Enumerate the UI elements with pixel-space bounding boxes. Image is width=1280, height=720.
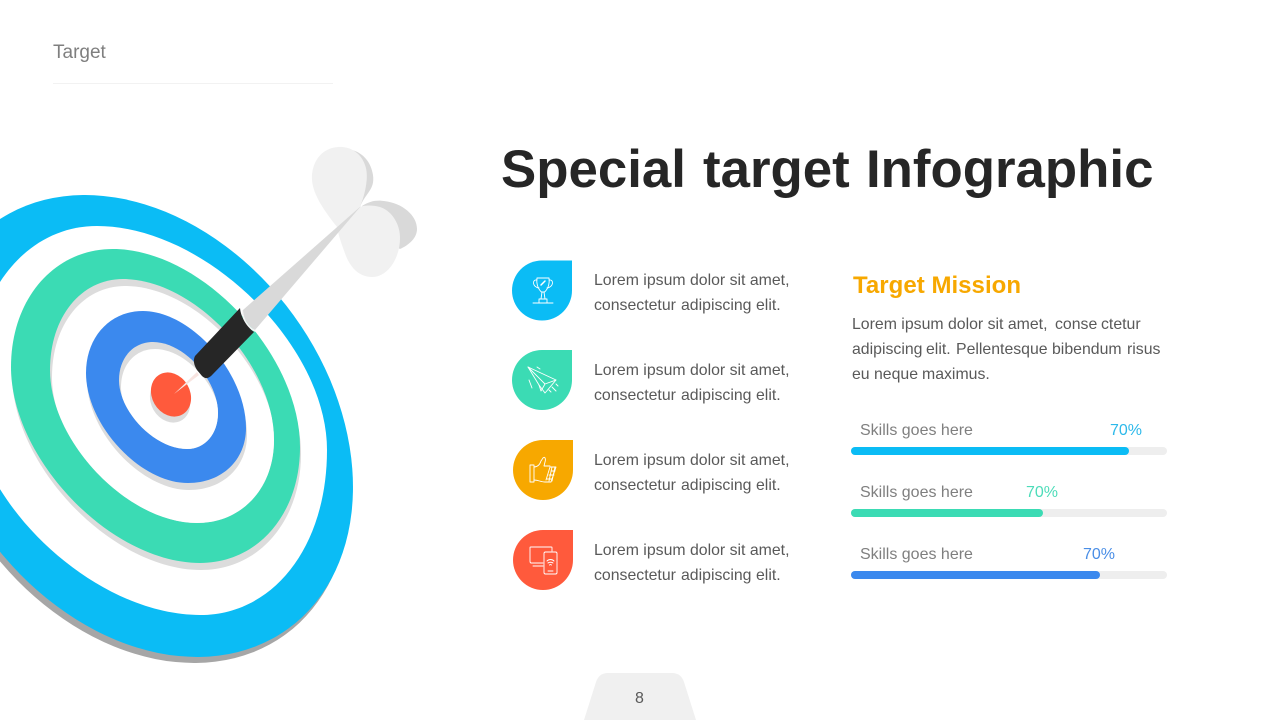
list row 4 [513,530,789,590]
list row 4: adipiscing [681,567,751,584]
dart [174,147,417,394]
list row 1: elit. [756,297,781,314]
mission paragraph: conse [1055,316,1097,333]
list row 1: adipiscing [681,297,751,314]
title: target [703,140,850,199]
header label: Target [53,42,107,63]
skill bar 1 [851,422,1167,455]
list row 3: elit. [756,477,781,494]
mission paragraph: neque [874,366,918,383]
list row 3: consectetur [594,477,677,494]
icon: devices with wifi [513,530,573,590]
dart needle [174,372,199,394]
list row 2: elit. [756,387,781,404]
mission paragraph: risus [1127,341,1161,358]
mission paragraph: ctetur [1101,316,1141,333]
title: Special [501,140,686,199]
skill bar 3 [851,546,1167,579]
text: Lorem ipsum dolor sit amet, [594,272,789,289]
text: Lorem ipsum dolor sit amet, [594,362,789,379]
dart flights [312,147,417,277]
list row 3 [513,440,789,500]
mission heading: Target Mission [853,272,1021,299]
list row 2: adipiscing [681,387,751,404]
list row 1: consectetur [594,297,677,314]
mission paragraph: elit. [926,341,951,358]
mission paragraph: adipiscing [852,341,922,358]
icon: trophy [512,260,572,320]
list row 3: adipiscing [681,477,751,494]
list row 2: consectetur [594,387,677,404]
title: Infographic [866,140,1153,199]
skill bar 3: Skills goes here [860,546,973,563]
mission paragraph: maximus. [922,366,990,383]
text: Lorem ipsum dolor sit amet, [594,452,789,469]
skill bar 3: 70% [1083,546,1115,563]
list row 4: consectetur [594,567,677,584]
target board illustration [0,195,353,663]
icon: paper plane [512,350,572,410]
page number tab: 8 [635,690,644,707]
skill bar 1: Skills goes here [860,422,973,439]
skill bar 1: 70% [1110,422,1142,439]
list row 4: elit. [756,567,781,584]
list row 2 [512,350,789,410]
page number tab [584,673,696,720]
mission paragraph: Pellentesque [956,341,1048,358]
mission paragraph: eu [852,366,870,383]
list row 1 [512,260,789,320]
mission paragraph: bibendum [1052,341,1122,358]
icon: thumbs up [513,440,573,500]
skill bar 2: 70% [1026,484,1058,501]
dart shaft [243,206,361,330]
text: Lorem ipsum dolor sit amet, [594,542,789,559]
skill bar 2: Skills goes here [860,484,973,501]
mission paragraph [852,316,1161,383]
skill bar 2 [851,484,1167,517]
dart barrel [194,308,254,378]
mission paragraph: Lorem ipsum dolor sit amet, [852,316,1047,333]
